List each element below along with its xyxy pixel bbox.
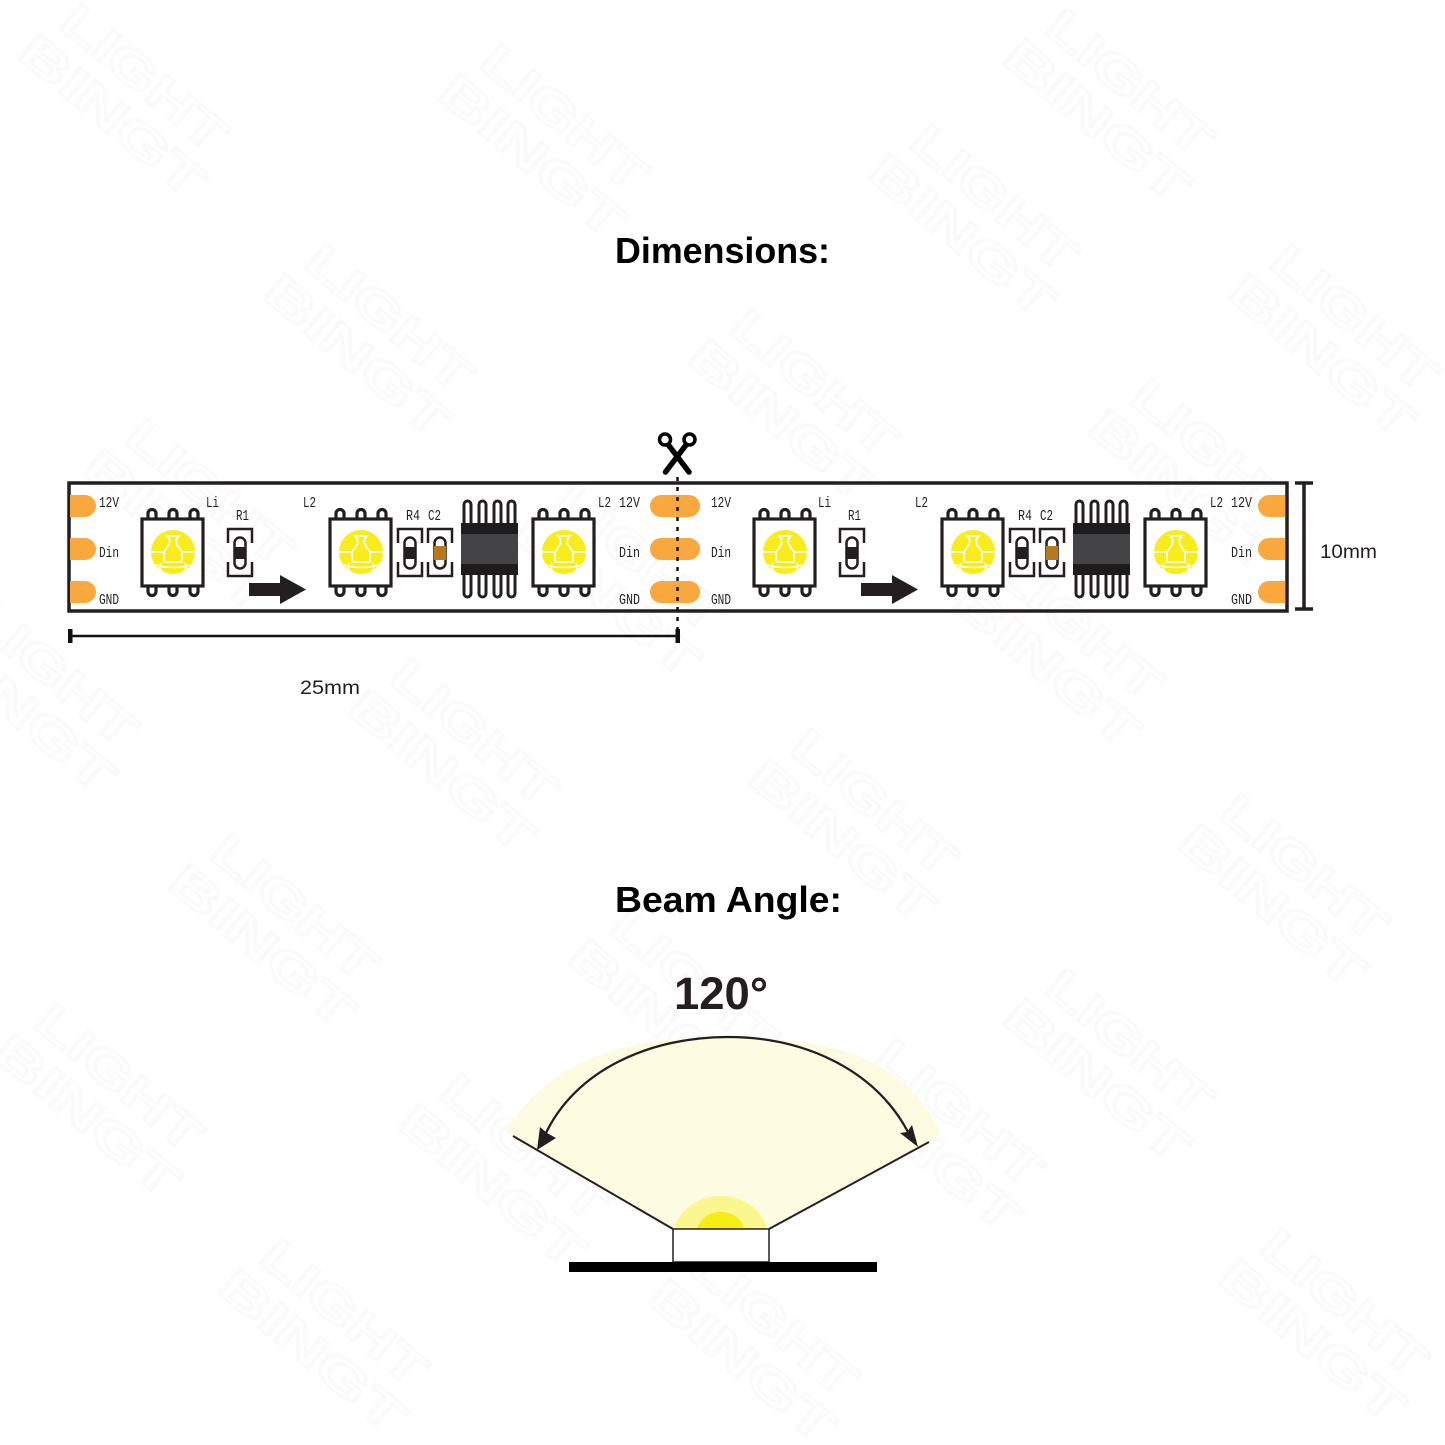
section 1 LEDs [142,510,594,596]
watermark pattern: BINGT [208,1259,415,1444]
section 2 labels: C2 [1040,508,1053,525]
section 1 labels: 12V [99,495,119,512]
section 1 labels: Li [206,495,219,512]
section 2 resistor R1 [840,529,864,576]
watermark pattern: BINGT [993,989,1200,1174]
section 2 labels: R1 [848,508,861,525]
section 1 resistor R1 [228,529,252,576]
watermark pattern: BINGT [738,749,945,934]
section 2 labels [711,495,1252,609]
LED body [673,1229,769,1262]
section 1 labels: GND [99,592,119,609]
watermark pattern: BINGT [388,1094,595,1279]
watermark pattern: BINGT [73,439,280,624]
section 2 labels: R4 [1018,508,1032,525]
watermark pattern: BINGT [823,1059,1030,1244]
watermark pattern: LIGHT [600,899,787,1068]
section 2 labels: GND [1231,592,1252,609]
section 2 capacitor C2 [1040,529,1064,576]
watermark pattern: BINGT [428,64,635,249]
watermark pattern: BINGT [1208,1249,1415,1434]
light glow inner [697,1212,744,1229]
watermark pattern: LIGHT [1035,0,1222,168]
arrowhead right [900,1125,918,1147]
section 1 IC chip [461,501,518,597]
section 1 labels: 12V [619,495,640,512]
section 1 labels: R1 [236,508,249,525]
watermark pattern: BINGT [503,504,710,689]
title: dimensions: Dimensions: [615,230,830,271]
watermark pattern: BINGT [558,929,765,1114]
section 2 LEDs [754,510,1206,596]
section 2 labels: Din [711,545,731,562]
watermark pattern: BINGT [993,29,1200,214]
dimension: 10mm width: 10mm [1320,542,1377,563]
LED strip diagram [69,483,1287,611]
beam angle value: 120° [674,968,768,1019]
base bar [569,1262,877,1272]
watermark pattern: BINGT [8,24,215,209]
icon: scissors [660,434,695,472]
watermark pattern: LIGHT [250,1229,437,1398]
watermark pattern: BINGT [338,679,545,864]
section 2 labels: Din [1231,545,1252,562]
section 1 labels: R4 [406,508,420,525]
watermark pattern: LIGHT [865,1029,1052,1198]
section 1 labels: Din [99,545,119,562]
section 1 labels: Din [619,545,640,562]
watermark pattern: LIGHT [680,1239,867,1408]
light glow outer [674,1196,767,1229]
section 1 labels: C2 [428,508,441,525]
watermark pattern: BINGT [1168,814,1375,999]
section 2 labels: L2 [915,495,928,512]
watermark pattern: LIGHT [295,234,482,403]
strip section 2 [711,495,1252,609]
watermark pattern: BINGT [1218,264,1425,449]
dimension: 25mm length [68,629,680,699]
beam edges [513,1136,929,1229]
watermark pattern: BINGT [678,329,885,514]
watermark pattern: LIGHT [115,409,302,578]
watermark pattern: BINGT [158,854,365,1039]
watermark pattern: BINGT [943,574,1150,759]
title: beam angle: Beam Angle: [615,879,842,920]
watermark pattern: LIGHT [985,544,1172,713]
watermark pattern: LIGHT [1035,959,1222,1128]
light cone [505,1037,941,1229]
watermark pattern: LIGHT [380,649,567,818]
dimension: 10mm width [1295,483,1377,609]
section 2 labels: GND [711,592,731,609]
watermark pattern: LIGHT [25,994,212,1163]
section 2 labels: L2 [1210,495,1223,512]
watermark pattern: LIGHT [545,474,732,643]
cut line [676,477,679,632]
strip section 1 [99,495,640,609]
section 2 IC chip [1073,501,1130,597]
watermark pattern: BINGT [1078,399,1285,584]
watermark pattern: LIGHT [1210,784,1397,953]
section 2 labels: 12V [1231,495,1252,512]
section 2 labels: 12V [711,495,731,512]
arrowhead left [537,1127,556,1150]
watermark pattern: BINGT [253,264,460,449]
watermark pattern: LIGHT [430,1064,617,1233]
strip outline [69,483,1287,611]
solder pads [70,495,1285,603]
watermark pattern: LIGHT [1250,1219,1437,1388]
section 2 direction arrow [861,575,918,604]
watermark pattern: LIGHT [1120,369,1307,538]
watermark pattern: LIGHT [780,719,967,888]
section 1 direction arrow [249,575,306,604]
section 1 labels [99,495,640,609]
watermark pattern: LIGHT [200,824,387,993]
beam angle diagram [505,1037,941,1272]
section 1 capacitor C2 [428,529,452,576]
watermark pattern: BINGT [858,144,1065,329]
angle arc [545,1037,908,1135]
watermark pattern: LIGHT [1260,234,1445,403]
watermark pattern: LIGHT [900,114,1087,283]
section 1 labels: L2 [303,495,316,512]
watermark pattern: LIGHT [720,299,907,468]
section 1 resistor R4 [398,529,422,576]
section 1 labels: GND [619,592,640,609]
section 2 resistor R4 [1010,529,1034,576]
dimension: 25mm length: 25mm [300,678,360,699]
watermark pattern: BINGT [638,1269,845,1445]
section 1 labels: L2 [598,495,611,512]
watermark pattern: LIGHT [470,34,657,203]
section 2 labels: Li [818,495,831,512]
